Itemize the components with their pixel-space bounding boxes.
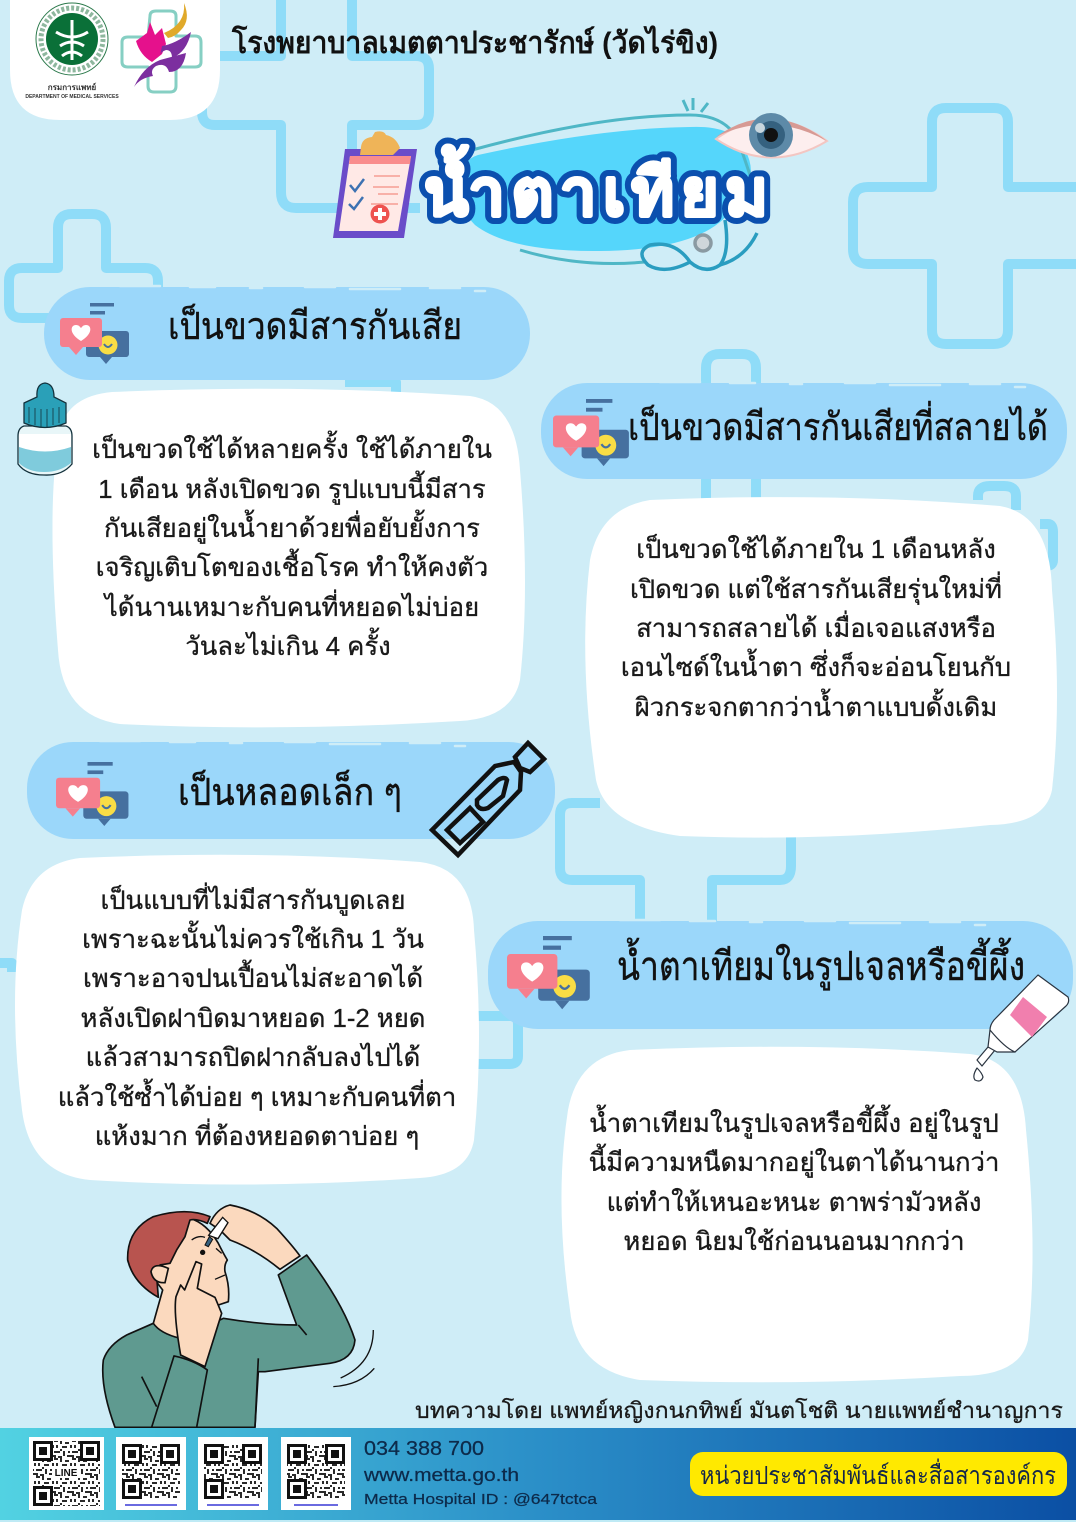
title blob decoration <box>459 98 751 264</box>
body text: แต่ทำให้เหนอะหนะ ตาพร่ามัวหลัง <box>607 1188 981 1217</box>
contact details <box>363 1438 598 1508</box>
body text <box>58 882 456 1151</box>
body text: แล้วสามารถปิดฝากลับลงไปได้ <box>86 1043 420 1072</box>
icon: chat bubbles <box>553 399 629 466</box>
title: น้ำตาเทียม <box>424 144 768 229</box>
icon: ministry of public health seal <box>36 3 108 75</box>
text card <box>15 855 479 1185</box>
contact details: 034 388 700 <box>364 1438 484 1460</box>
body text: กันเสียอยู่ในน้ำยาด้วยพื่อยับยั้งการ <box>104 510 480 544</box>
department text <box>25 82 119 100</box>
panel: gel or ointment <box>488 920 1073 1382</box>
icon: clipboard <box>333 131 417 238</box>
icon: gel tube <box>974 975 1069 1081</box>
body text: วันละไม่เกิน 4 ครั้ง <box>185 628 391 661</box>
body text: เพราะฉะนั้นไม่ควรใช้เกิน 1 วัน <box>82 921 424 954</box>
QR code 2 <box>116 1437 186 1510</box>
panel: small vials <box>15 741 555 1185</box>
body text: แห้งมาก ที่ต้องหยอดตาบ่อย ๆ <box>95 1118 419 1151</box>
panel: preservative that dissolves <box>541 382 1067 838</box>
body text <box>92 431 492 661</box>
body text: เพราะอาจปนเปื้อนไม่สะอาดได้ <box>83 960 423 993</box>
body text: เจริญเติบโตของเชื้อโรค ทำให้คงตัว <box>96 549 488 582</box>
hair <box>128 1212 210 1297</box>
contact details: www.metta.go.th <box>363 1464 519 1485</box>
text card <box>52 389 525 727</box>
department text: DEPARTMENT OF MEDICAL SERVICES <box>25 94 119 100</box>
sweater <box>103 1255 355 1427</box>
body text: เอนไซด์ในน้ำตา ซึ่งก็จะอ่อนโยนกับ <box>621 649 1011 682</box>
icon: single dose vial <box>432 743 544 855</box>
body text: สามารถสลายได้ เมื่อเจอแสงหรือ <box>636 610 996 643</box>
sweater creases <box>142 1325 307 1427</box>
body text: ผิวกระจกตากว่าน้ำตาแบบดั้งเดิม <box>635 689 997 722</box>
raised hand <box>210 1205 300 1269</box>
icon: chat bubbles <box>507 936 590 1009</box>
text card <box>561 1047 1033 1382</box>
icon: eye drop bottle <box>18 383 72 475</box>
icon: stethoscope <box>642 220 757 269</box>
body text: 1 เดือน หลังเปิดขวด รูปแบบนี้มีสาร <box>98 471 486 505</box>
panel: header logos <box>10 0 220 120</box>
contact details: Metta Hospital ID : @647tctca <box>364 1491 598 1508</box>
icon: chat bubbles <box>60 303 129 364</box>
body text: เปิดขวด แต่ใช้สารกันเสียรุ่นใหม่ที่ <box>630 571 1002 605</box>
title: น้ำตาเทียม <box>424 144 768 229</box>
eye <box>200 1250 205 1255</box>
illustration: man using eye drops <box>103 1205 374 1427</box>
facial features <box>192 1237 225 1279</box>
body text: น้ำตาเทียมในรูปเจลหรือขี้ผึ้ง อยู่ในรูป <box>589 1105 999 1139</box>
heading text: เป็นหลอดเล็ก ๆ <box>178 769 402 814</box>
body text <box>621 533 1011 722</box>
body text: แล้วใช้ซ้ำได้บ่อย ๆ เหมาะกับคนที่ตา <box>58 1079 456 1112</box>
hospital name heading: โรงพยาบาลเมตตาประชารักษ์ (วัดไร่ขิง) <box>231 24 718 60</box>
dropper bottle <box>209 1217 228 1239</box>
body text: เป็นขวดใช้ได้หลายครั้ง ใช้ได้ภายใน <box>92 431 492 464</box>
heading banner <box>44 286 530 380</box>
icon: eye <box>716 113 827 158</box>
QR code: LINE <box>29 1437 104 1510</box>
author credit: บทความโดย แพทย์หญิงกนกทิพย์ มันตโชติ นายแพทย์ชำนาญการ <box>415 1398 1063 1423</box>
icon: metta hospital logo <box>122 3 201 92</box>
body text: หลังเปิดฝาบิดมาหยอด 1-2 หยด <box>81 1005 425 1033</box>
department badge <box>690 1452 1067 1496</box>
QR code: LINE: LINE <box>55 1468 78 1479</box>
body text: เป็นขวดใช้ได้ภายใน 1 เดือนหลัง <box>636 533 996 564</box>
ear <box>151 1266 168 1283</box>
icon: chat bubbles <box>56 762 128 826</box>
body text: เป็นแบบที่ไม่มีสารกันบูดเลย <box>100 882 406 916</box>
body text <box>589 1105 999 1256</box>
background medical crosses <box>0 0 1076 1064</box>
body text: ได้นานเหมาะกับคนที่หยอดไม่บ่อย <box>103 589 479 622</box>
department text: กรมการแพทย์ <box>48 82 97 92</box>
panel: preserved bottle <box>18 286 530 727</box>
neck and head <box>150 1217 229 1338</box>
heading text: เป็นขวดมีสารกันเสีย <box>168 303 462 348</box>
sleeve <box>152 1356 207 1427</box>
body text: นี้มีความหนืดมากอยู่ในตาได้นานกว่า <box>589 1144 999 1178</box>
lower hand <box>175 1262 222 1367</box>
heading banner <box>488 920 1073 1029</box>
text card <box>585 497 1057 838</box>
QR code 4 <box>281 1437 351 1510</box>
heading banner <box>541 382 1067 479</box>
QR code 3 <box>198 1437 268 1510</box>
motion lines <box>333 1330 374 1387</box>
heading banner <box>27 741 555 839</box>
body text: หยอด นิยมใช้ก่อนนอนมากกว่า <box>623 1227 965 1256</box>
footer bar <box>0 1428 1076 1522</box>
